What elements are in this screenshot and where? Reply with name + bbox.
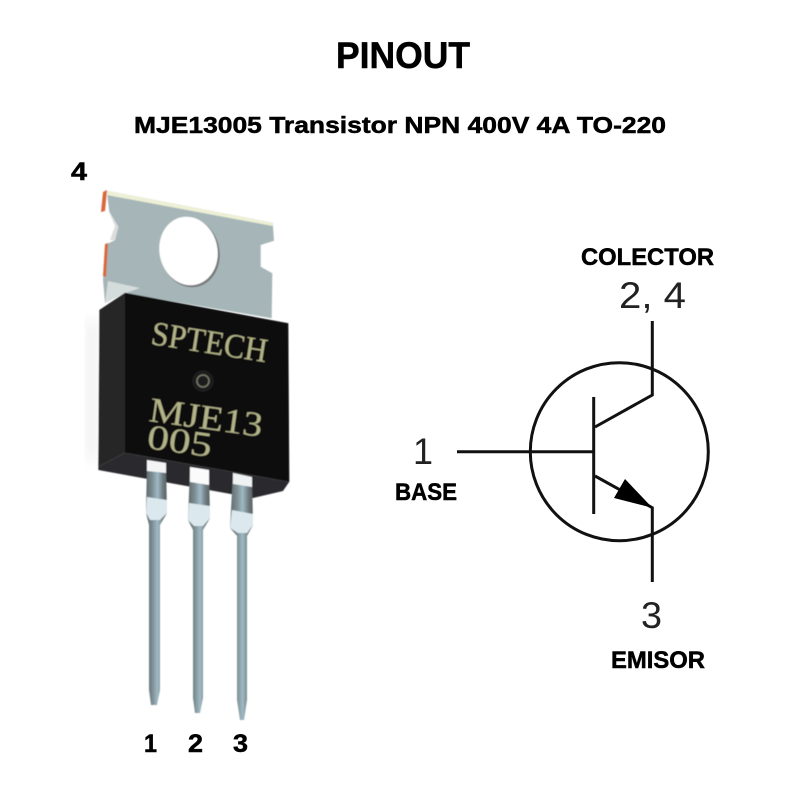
- outer circle: [530, 363, 708, 541]
- label: colector: COLECTOR: [581, 244, 714, 271]
- subtitle: MJE13005 Transistor NPN 400V 4A TO-220: [134, 112, 666, 138]
- lead 1: [146, 460, 167, 705]
- NPN transistor schematic symbol: [457, 321, 708, 582]
- body marking: SPTECH: SPTECH: [149, 315, 270, 370]
- emitter arrow: [614, 479, 652, 508]
- pin label: 1: 1: [144, 730, 157, 758]
- title: PINOUT: [336, 35, 470, 76]
- base lead: [457, 450, 594, 453]
- soft shadow: [86, 320, 98, 460]
- base bar: [592, 397, 595, 514]
- lead 3: [230, 473, 253, 720]
- pin label: tab 4: 4: [71, 158, 87, 186]
- pin number: 2, 4: 2, 4: [619, 275, 686, 316]
- pin number: 1: 1: [413, 431, 433, 472]
- metal tab: [101, 190, 274, 318]
- pin number: 3: 3: [641, 595, 662, 636]
- label: emisor: EMISOR: [611, 647, 705, 674]
- transistor photo: [86, 190, 289, 720]
- collector lead: [595, 321, 652, 427]
- pin label: 2: 2: [188, 730, 203, 758]
- emitter lead: [595, 476, 652, 582]
- black body: [98, 293, 289, 498]
- body marking: logo: [192, 370, 214, 392]
- pin label: 3: 3: [233, 730, 248, 758]
- lead 2: [188, 467, 210, 713]
- body marking: MJE13: MJE13: [147, 390, 265, 445]
- body marking: 005: 005: [145, 417, 215, 465]
- label: base: BASE: [395, 479, 457, 506]
